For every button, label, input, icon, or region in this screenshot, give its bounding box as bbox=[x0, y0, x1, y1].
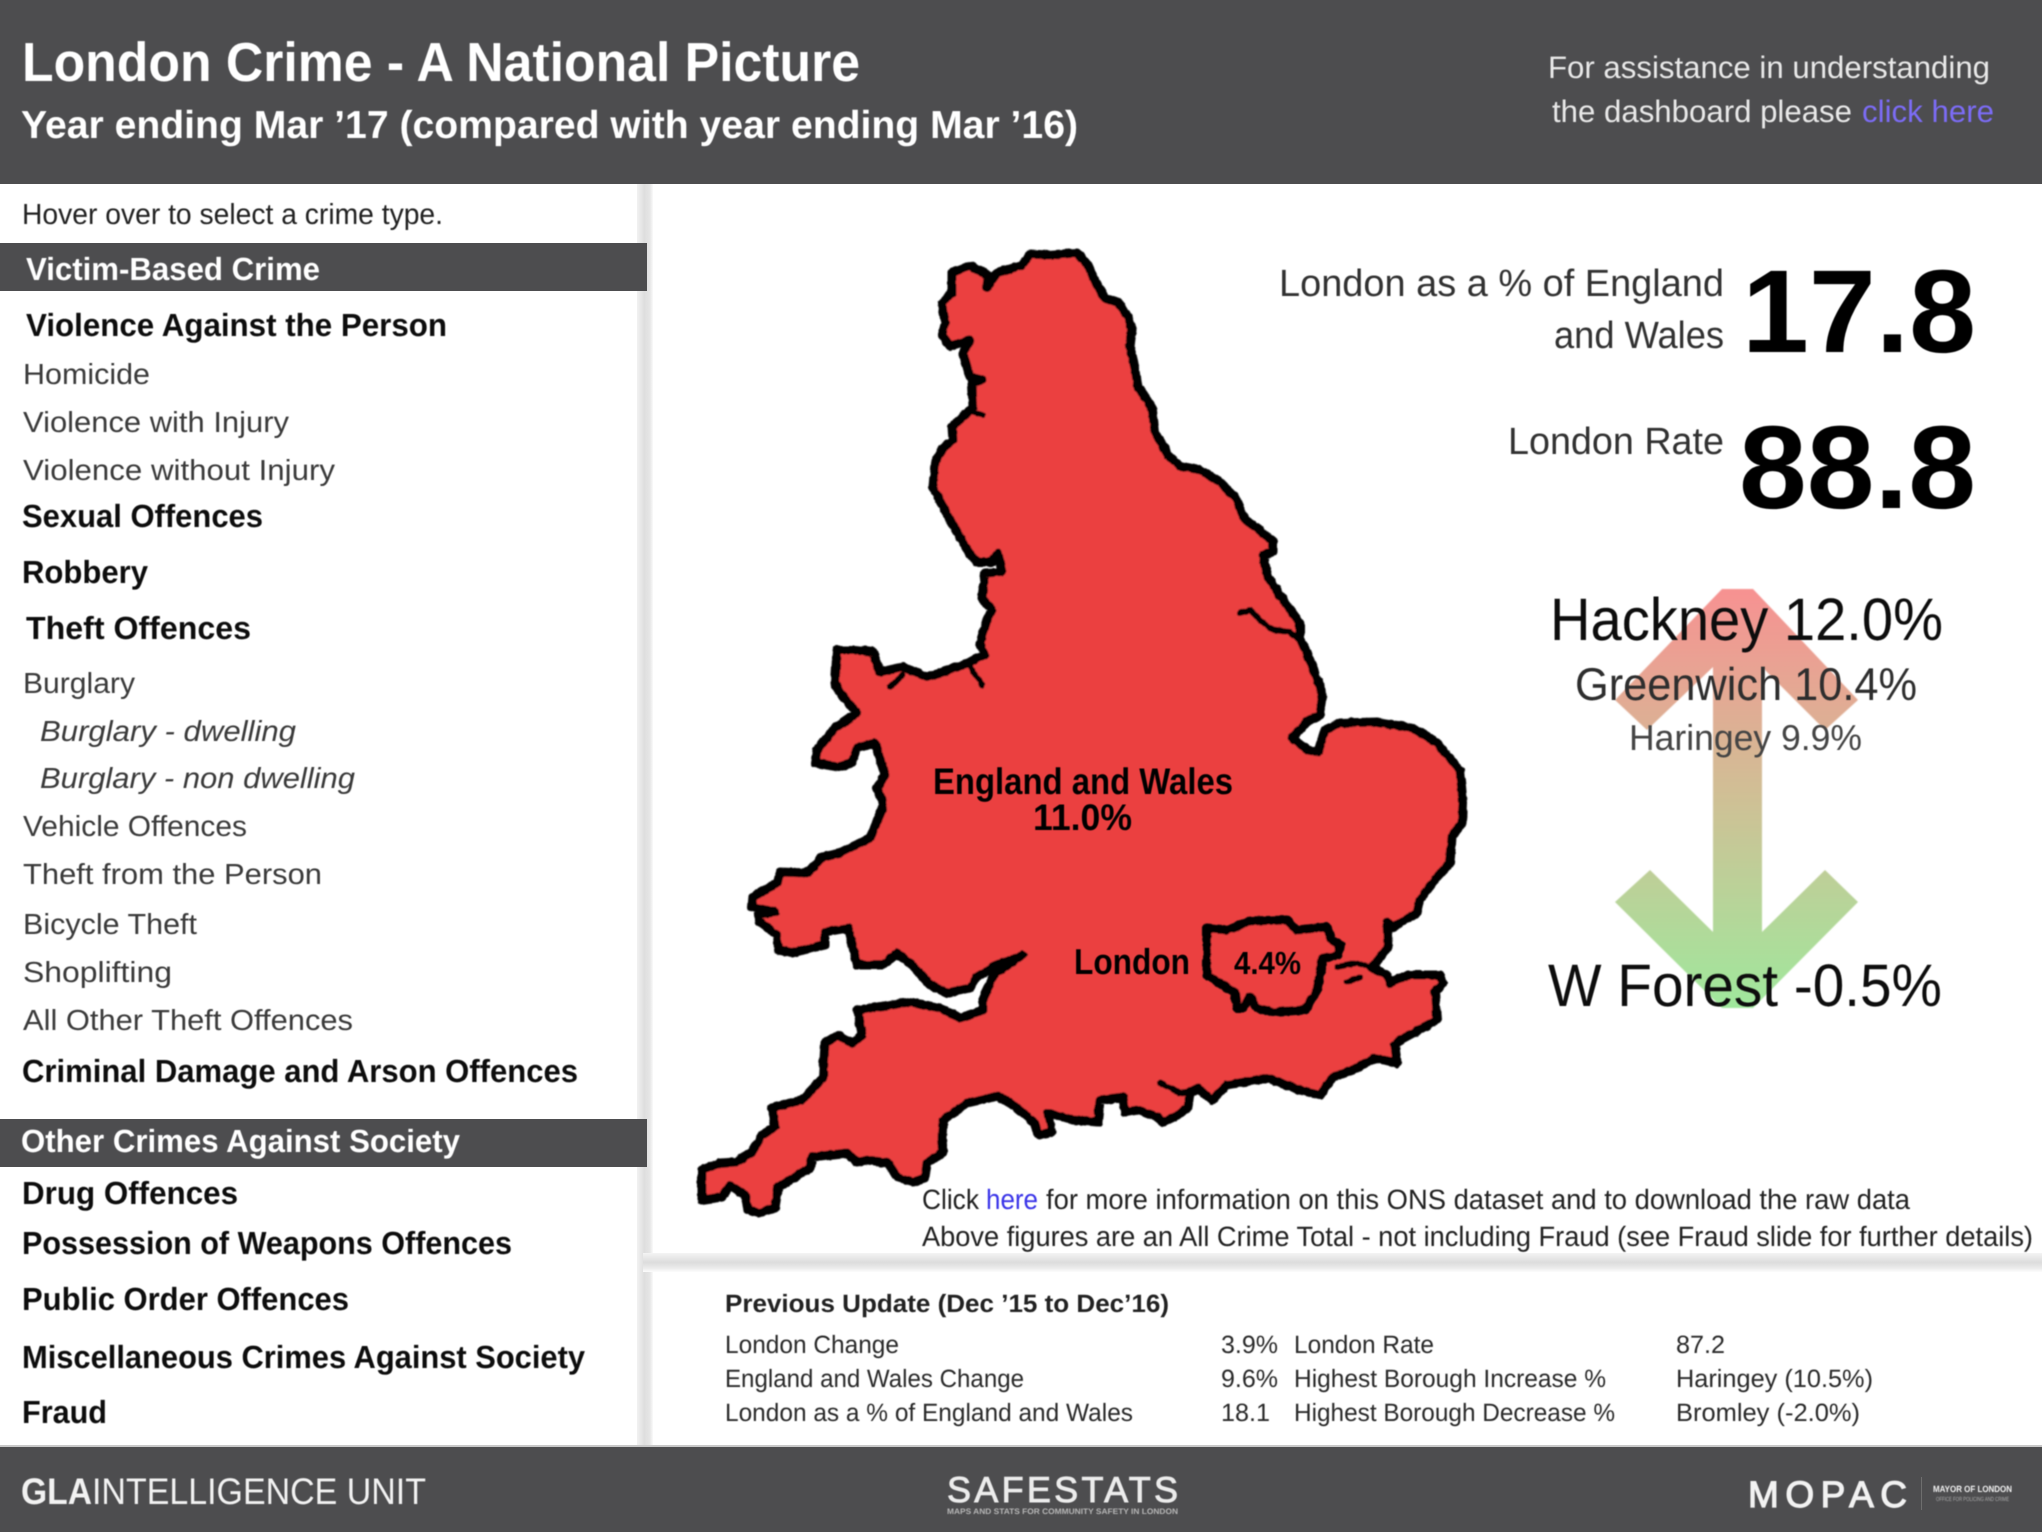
logo: MOPAC: OFFICE FOR POLICING AND CRIME bbox=[1936, 1496, 2009, 1503]
stat: London rate: London Rate bbox=[1508, 421, 1724, 463]
victim-based crime list: Burglary - non dwelling bbox=[40, 763, 355, 795]
previous update table: Bromley (-2.0%) bbox=[1676, 1399, 1860, 1427]
previous update heading: Previous Update (Dec ’15 to Dec’16) bbox=[725, 1290, 1169, 1318]
help text bbox=[1548, 50, 1994, 129]
footer band bbox=[0, 1445, 2042, 1532]
second highest borough: Greenwich 10.4% bbox=[1575, 658, 1917, 710]
victim-based crime list: Homicide bbox=[23, 359, 150, 391]
previous update table: England and Wales Change bbox=[725, 1365, 1024, 1393]
victim-based crime list: Theft from the Person bbox=[23, 859, 322, 891]
other crimes list: Public Order Offences bbox=[22, 1281, 349, 1317]
panel dividers bbox=[637, 184, 2042, 1447]
other crimes list bbox=[22, 1175, 585, 1430]
previous update table: 87.2 bbox=[1676, 1331, 1725, 1359]
section heading: victim-based crime: Victim-Based Crime bbox=[26, 251, 320, 287]
victim-based crime list: Violence Against the Person bbox=[26, 307, 447, 343]
dataset notes bbox=[922, 1184, 2033, 1252]
London outline bbox=[1207, 920, 1340, 1012]
other crimes list: Possession of Weapons Offences bbox=[22, 1225, 512, 1261]
map: England and Wales bbox=[702, 253, 1463, 1213]
victim-based crime list: Robbery bbox=[22, 554, 148, 590]
previous update table: 9.6% bbox=[1221, 1365, 1278, 1393]
previous update table: London Change bbox=[725, 1331, 899, 1359]
lowest borough change: W Forest -0.5% bbox=[1548, 952, 1942, 1019]
panel: previous update bbox=[725, 1290, 1873, 1427]
dataset notes: Above figures are an All Crime Total - not including Fraud (see Fraud slide for further details) bbox=[922, 1221, 2033, 1252]
stat: London as a percentage of England and Wales: London as a % of England bbox=[1279, 263, 1724, 305]
previous update table: London as a % of England and Wales bbox=[725, 1399, 1133, 1427]
England and Wales outline bbox=[702, 253, 1463, 1213]
victim-based crime list: Burglary - dwelling bbox=[40, 716, 296, 748]
other crimes list: Fraud bbox=[22, 1394, 107, 1430]
logo: GLA Intelligence Unit: INTELLIGENCE UNIT bbox=[92, 1471, 426, 1512]
stat: London as a percentage of England and Wales: and Wales bbox=[1554, 315, 1724, 357]
map label: England and Wales: 11.0% bbox=[1033, 797, 1132, 838]
map label: London: 4.4% bbox=[1234, 945, 1301, 981]
help text: the dashboard please bbox=[1552, 94, 1852, 129]
section heading: other crimes against society: Other Crimes Against Society bbox=[21, 1123, 460, 1159]
menu instruction: Hover over to select a crime type. bbox=[22, 199, 443, 231]
previous update table: Highest Borough Decrease % bbox=[1294, 1399, 1615, 1427]
logo: SafeStats: MAPS AND STATS FOR COMMUNITY SAFETY IN LONDON bbox=[947, 1507, 1178, 1516]
dataset notes: Click bbox=[922, 1184, 980, 1215]
victim-based crime list: Sexual Offences bbox=[22, 498, 263, 534]
other crimes list: Drug Offences bbox=[22, 1175, 238, 1211]
section heading: other crimes against society bbox=[0, 1119, 647, 1167]
subtitle: Year ending Mar ’17 (compared with year ending Mar ’16) bbox=[21, 104, 1078, 147]
logo: MOPAC: MOPAC bbox=[1748, 1474, 1907, 1515]
victim-based crime list: All Other Theft Offences bbox=[23, 1005, 353, 1037]
map label: London bbox=[1074, 941, 1301, 982]
map label: England and Wales: England and Wales bbox=[933, 761, 1233, 802]
previous update table bbox=[725, 1331, 1873, 1427]
victim-based crime list: Theft Offences bbox=[26, 610, 251, 646]
logo: MOPAC: MAYOR OF LONDON bbox=[1933, 1484, 2012, 1494]
stat: London as a percentage of England and Wales: 17.8 bbox=[1742, 246, 1976, 378]
victim-based crime list bbox=[22, 307, 578, 1089]
highest borough increase: Hackney 12.0% bbox=[1550, 586, 1943, 653]
help text: click here bbox=[1862, 94, 1994, 129]
previous update table: Haringey (10.5%) bbox=[1676, 1365, 1873, 1393]
victim-based crime list: Violence without Injury bbox=[23, 455, 336, 487]
panel: crime type menu bbox=[0, 199, 647, 1430]
other crimes list: Miscellaneous Crimes Against Society bbox=[22, 1339, 585, 1375]
stat: London rate: 88.8 bbox=[1739, 402, 1976, 534]
previous update table: London Rate bbox=[1294, 1331, 1434, 1359]
stat: London as a percentage of England and Wales bbox=[1279, 246, 1976, 378]
victim-based crime list: Criminal Damage and Arson Offences bbox=[22, 1053, 578, 1089]
previous update table: 18.1 bbox=[1221, 1399, 1270, 1427]
previous update table: Highest Borough Increase % bbox=[1294, 1365, 1606, 1393]
victim-based crime list: Bicycle Theft bbox=[23, 909, 197, 941]
stat: London rate bbox=[1508, 402, 1976, 534]
previous update table: 3.9% bbox=[1221, 1331, 1278, 1359]
victim-based crime list: Shoplifting bbox=[23, 957, 172, 989]
logo: GLA Intelligence Unit: GLA bbox=[21, 1471, 92, 1512]
logo: SafeStats: SAFESTATS bbox=[947, 1469, 1178, 1510]
arrow: borough change range bbox=[1615, 589, 1858, 1008]
victim-based crime list: Vehicle Offences bbox=[23, 811, 247, 843]
header band bbox=[0, 0, 2042, 184]
victim-based crime list: Burglary bbox=[23, 668, 136, 700]
victim-based crime list: Violence with Injury bbox=[23, 407, 290, 439]
section heading: victim-based crime bbox=[0, 243, 647, 291]
third highest borough: Haringey 9.9% bbox=[1629, 717, 1862, 758]
help text: For assistance in understanding bbox=[1548, 50, 1990, 85]
dataset notes: here bbox=[986, 1184, 1038, 1215]
logo: MOPAC bbox=[1748, 1474, 2012, 1515]
borough labels bbox=[1548, 586, 1943, 1019]
map label: England and Wales bbox=[933, 761, 1233, 838]
title: London Crime - A National Picture bbox=[22, 31, 860, 93]
dataset notes: for more information on this ONS dataset and to download the raw data bbox=[1046, 1184, 1910, 1215]
map label: London: London bbox=[1074, 941, 1190, 982]
